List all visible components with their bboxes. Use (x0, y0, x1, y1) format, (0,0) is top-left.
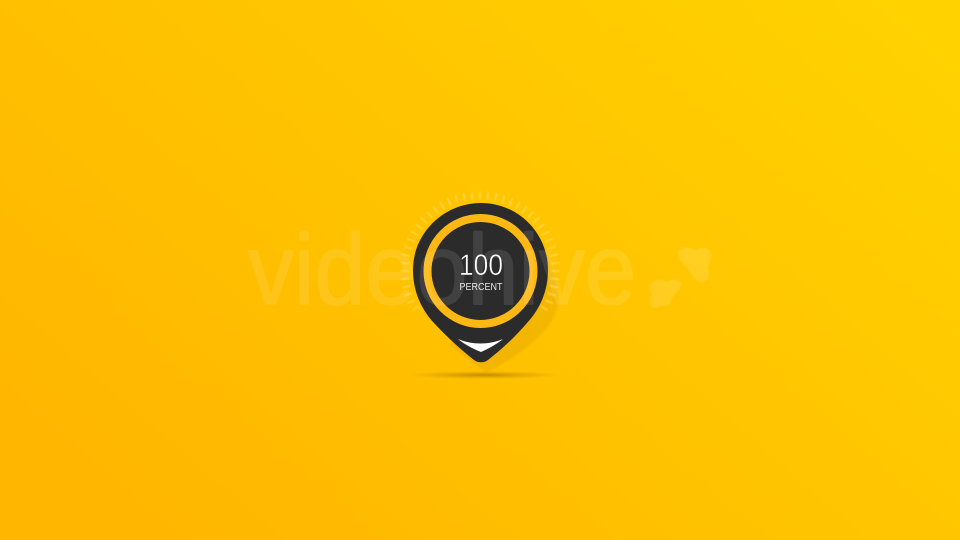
percent label: PERCENT (460, 282, 502, 293)
yellow ring (428, 218, 534, 324)
map pin (413, 203, 548, 362)
ground shadow (408, 371, 560, 379)
tick marks (401, 192, 559, 310)
watermark logo (650, 247, 711, 308)
logo upper blob (678, 247, 711, 282)
logo lower blob (650, 280, 681, 308)
watermark text: videohive (248, 214, 636, 326)
white smile marker (458, 339, 503, 352)
value label: 100 (459, 249, 503, 282)
pin body (413, 203, 548, 362)
pin long shadow (450, 227, 558, 373)
